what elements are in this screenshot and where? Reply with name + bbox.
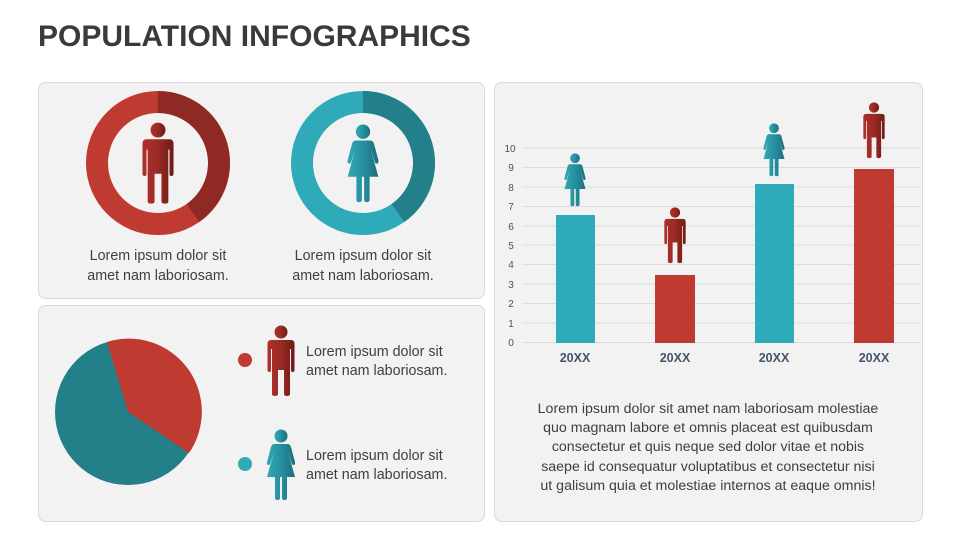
bar chart: 1 — [508, 319, 514, 330]
legend: male: amet nam laboriosam. — [306, 363, 447, 379]
bar chart: 20XX — [660, 351, 691, 365]
panel: donuts — [38, 82, 484, 298]
text: description: Lorem ipsum dolor sit amet nam laboriosam molestiae — [538, 401, 878, 417]
title: POPULATION INFOGRAPHICS — [38, 20, 471, 53]
legend: male: Lorem ipsum dolor sit — [306, 344, 443, 360]
bar chart: 20XX — [560, 351, 591, 365]
legend: male — [238, 326, 447, 396]
bar chart: 20XX — [759, 351, 790, 365]
panel: bar chart — [494, 82, 922, 522]
bar chart: 2 — [508, 299, 514, 310]
text: male caption: amet nam laboriosam. — [87, 268, 229, 284]
legend: female — [238, 430, 447, 500]
text: description: ut galisum quia et molestiae internos at eaque omnis! — [540, 478, 876, 494]
text: description: quo magnam labore et omnis placeat est quibusdam — [543, 420, 873, 436]
pie chart — [55, 339, 202, 485]
text: male caption: Lorem ipsum dolor sit — [90, 248, 226, 264]
bar chart: 0 — [508, 338, 514, 349]
bar chart — [504, 102, 920, 365]
text: description: consectetur et quis neque sed dolor vitae et nobis — [552, 439, 864, 455]
bar chart: 7 — [508, 202, 514, 213]
bar chart: 5 — [508, 241, 514, 252]
bar chart: 9 — [508, 163, 514, 174]
bar chart: 20XX — [859, 351, 890, 365]
panel: pie — [38, 306, 484, 522]
text: description: saepe id consequatur voluptatibus et consectetur nisi — [541, 459, 875, 475]
bar chart: 4 — [508, 260, 514, 271]
donut: female — [302, 91, 435, 224]
donut: male — [97, 91, 230, 224]
text: female caption: amet nam laboriosam. — [292, 268, 434, 284]
bar chart: 3 — [508, 280, 514, 291]
bar chart: 6 — [508, 222, 514, 233]
text: female caption: Lorem ipsum dolor sit — [295, 248, 431, 264]
bar chart: 8 — [508, 183, 514, 194]
legend: female: Lorem ipsum dolor sit — [306, 448, 443, 464]
bar chart: 10 — [504, 144, 516, 155]
legend: female: amet nam laboriosam. — [306, 467, 447, 483]
